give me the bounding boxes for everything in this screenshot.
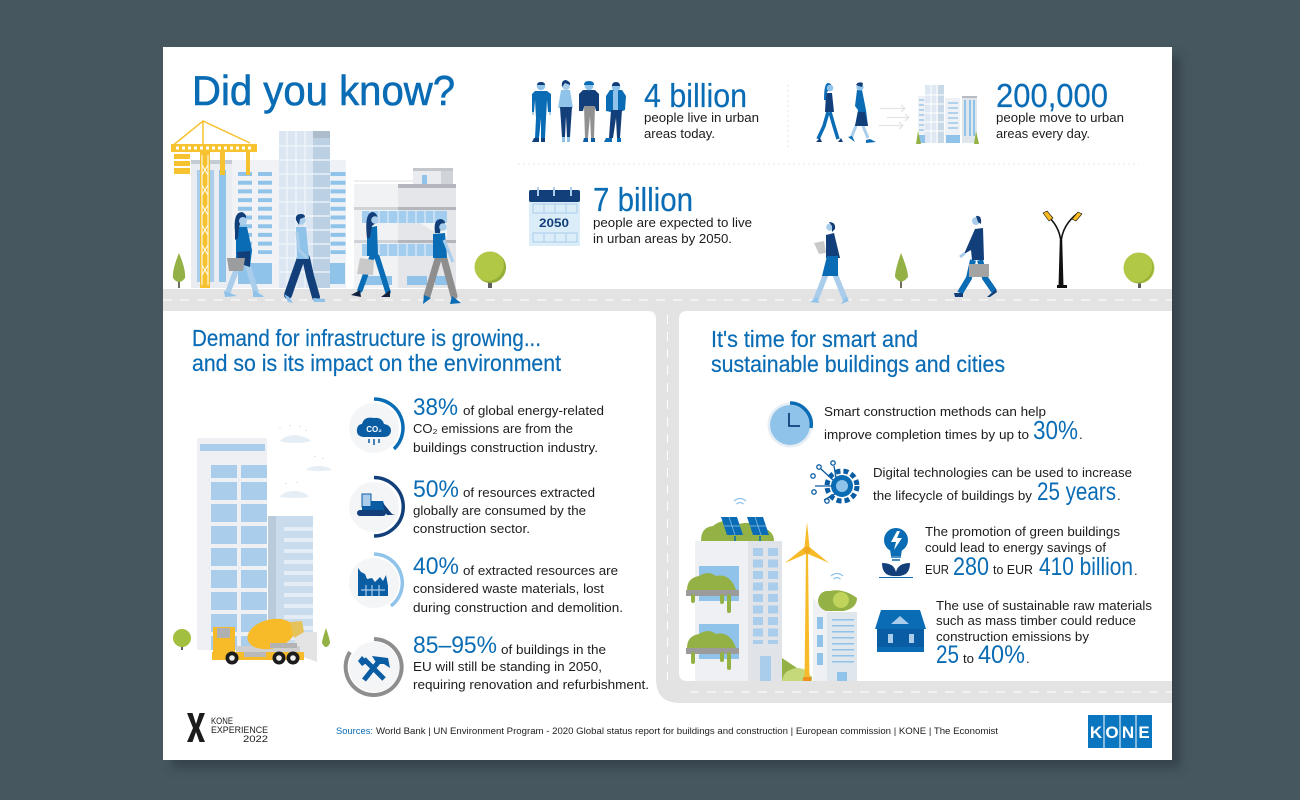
item: 40% waste [349, 553, 623, 615]
item: 40% waste: of extracted resources are [463, 563, 618, 578]
icon: light bulb with plant [879, 528, 913, 578]
heading: smart and sustainable: It's time for smart and [711, 326, 918, 352]
item: sustainable materials: construction emissions by [936, 629, 1090, 644]
logo: KONE Experience 2022 [187, 713, 268, 745]
tree: cone right [895, 253, 908, 288]
icon: mini city building [916, 85, 979, 144]
tree: cone left [173, 253, 185, 288]
item: 85–95% buildings [346, 632, 649, 695]
stat: 7 billion: in urban areas by 2050. [593, 231, 732, 246]
item: 85–95% buildings: of buildings in the [501, 642, 606, 657]
stat: 200,000: 200,000 [996, 77, 1108, 114]
icon: clock [768, 402, 812, 448]
figure: man in open jacket [604, 82, 626, 142]
figure: woman in light top [558, 80, 573, 142]
icon: timber house [875, 610, 926, 652]
item: sustainable materials: . [1026, 651, 1030, 666]
item: sustainable materials: to [963, 651, 974, 666]
sources: Sources: [336, 726, 373, 736]
sources: World Bank | UN Environment Program - 2020 Global status report for buildings and construction | European commission | KONE | The Economist [376, 726, 999, 736]
title: Did you know? [192, 67, 455, 114]
tree: bush right [1124, 252, 1154, 288]
item: green buildings savings [879, 524, 1138, 581]
heading: smart and sustainable: sustainable buildings and cities [711, 351, 1005, 377]
item: 50% resources: 50% [413, 476, 459, 503]
item: green buildings savings: . [1134, 563, 1138, 578]
item: 40% waste: considered waste materials, lost [413, 581, 604, 596]
item: sustainable materials: 25 [936, 641, 959, 669]
item: lifecycle: the lifecycle of buildings by [873, 488, 1032, 503]
icon: 2050 calendar [529, 187, 580, 246]
stat: 200,000: people move to urban [996, 110, 1124, 125]
item: sustainable materials: 40% [978, 641, 1025, 669]
item: 85–95% buildings: EU will still be standing in 2050, [413, 659, 602, 674]
item: completion times: . [1079, 427, 1083, 442]
item: green buildings savings: EUR [925, 562, 949, 577]
item: 50% resources [349, 476, 595, 536]
arrows toward building [879, 105, 909, 129]
logo: KONE Experience 2022: EXPERIENCE [211, 725, 268, 736]
figure: man in navy sweater [579, 81, 599, 142]
item: 38% emissions: 38% [413, 394, 458, 421]
item: 40% waste: during construction and demolition. [413, 600, 623, 615]
figure: man in blue suit [532, 82, 551, 142]
item: lifecycle: 25 years [1037, 478, 1116, 506]
stat: 7 billion: people are expected to live [593, 215, 752, 230]
illustration: city skyline with crane [171, 121, 456, 288]
item: completion times: Smart construction methods can help [824, 404, 1046, 419]
item: 38% emissions: CO₂ emissions are from the [413, 421, 573, 436]
person: businesswoman with tablet [810, 222, 849, 304]
stat: 4 billion [644, 77, 759, 141]
item: 38% emissions: buildings construction industry. [413, 440, 598, 455]
logo: KONE: E [1138, 723, 1150, 742]
icon: digital gear [811, 461, 857, 503]
item: green buildings savings: 280 [953, 553, 989, 581]
logo: KONE Experience 2022: 2022 [243, 734, 268, 745]
logo: KONE [1088, 715, 1152, 748]
tree: small cone [322, 628, 330, 647]
item: green buildings savings: to EUR [993, 562, 1033, 577]
stat: 7 billion [593, 181, 752, 246]
item: sustainable materials [875, 598, 1153, 669]
item: 50% resources: construction sector. [413, 521, 530, 536]
item: 50% resources: globally are consumed by the [413, 503, 586, 518]
item: green buildings savings: The promotion of green buildings [925, 524, 1121, 539]
item: 38% emissions: of global energy-related [463, 403, 604, 418]
icon: CO2 cloud [349, 399, 403, 453]
item: 40% waste: 40% [413, 553, 459, 580]
heading: demand for infrastructure [192, 325, 562, 376]
icon group: four people [532, 80, 626, 142]
stat: 4 billion: people live in urban [644, 110, 759, 125]
logo: KONE Experience 2022: KONE [211, 716, 233, 727]
icon: 2050 calendar: 2050 [539, 216, 569, 230]
illustration: green building and wind turbine [686, 498, 857, 681]
person: man in light shirt [284, 214, 325, 303]
card shadow [172, 56, 1180, 768]
tree: bush left [474, 252, 506, 288]
stat: 200,000 [996, 77, 1124, 141]
stat: 4 billion: areas today. [644, 126, 715, 141]
heading: demand for infrastructure: Demand for infrastructure is growing... [192, 325, 541, 351]
stat: 4 billion: 4 billion [644, 77, 747, 114]
item: completion times: improve completion times by up to [824, 427, 1029, 442]
icon: bulldozer [349, 478, 403, 536]
person: woman with shopping bag [351, 212, 390, 297]
person: woman with grey bag [224, 212, 264, 297]
tree: small round [173, 629, 191, 650]
stat: 200,000: areas every day. [996, 126, 1090, 141]
road network [163, 289, 1172, 703]
icon: two walkers [816, 82, 876, 143]
icon: CO2 cloud: CO₂ [366, 425, 382, 434]
heading: smart and sustainable [711, 326, 1005, 377]
street lamp [1043, 211, 1082, 288]
item: 85–95% buildings: requiring renovation and refurbishment. [413, 677, 649, 692]
item: completion times [768, 402, 1083, 448]
logo: KONE: K [1090, 723, 1103, 742]
item: lifecycle: Digital technologies can be used to increase [873, 465, 1132, 480]
item: completion times: 30% [1033, 415, 1078, 445]
person: woman in grey trousers [423, 219, 461, 304]
item: lifecycle: . [1117, 488, 1121, 503]
item: sustainable materials: such as mass timber could reduce [936, 613, 1136, 628]
item: green buildings savings: 410 billion [1039, 553, 1133, 581]
item: lifecycle [811, 461, 1132, 506]
illustration: tower with cement mixer [197, 425, 332, 664]
logo: KONE: O [1105, 723, 1119, 742]
infographic card [163, 47, 1172, 760]
item: 50% resources: of resources extracted [463, 485, 595, 500]
icon: hammer and wrench [346, 639, 402, 695]
heading: demand for infrastructure: and so is its impact on the environment [192, 350, 562, 376]
item: sustainable materials: The use of sustainable raw materials [936, 598, 1153, 613]
item: 85–95% buildings: 85–95% [413, 632, 497, 659]
icon: demolished factory [349, 554, 402, 608]
logo: KONE: N [1122, 723, 1134, 742]
person: businessman with briefcase [954, 216, 997, 297]
item: 38% emissions [349, 394, 604, 455]
item: green buildings savings: could lead to energy savings of [925, 540, 1106, 555]
stat: 7 billion: 7 billion [593, 181, 693, 218]
